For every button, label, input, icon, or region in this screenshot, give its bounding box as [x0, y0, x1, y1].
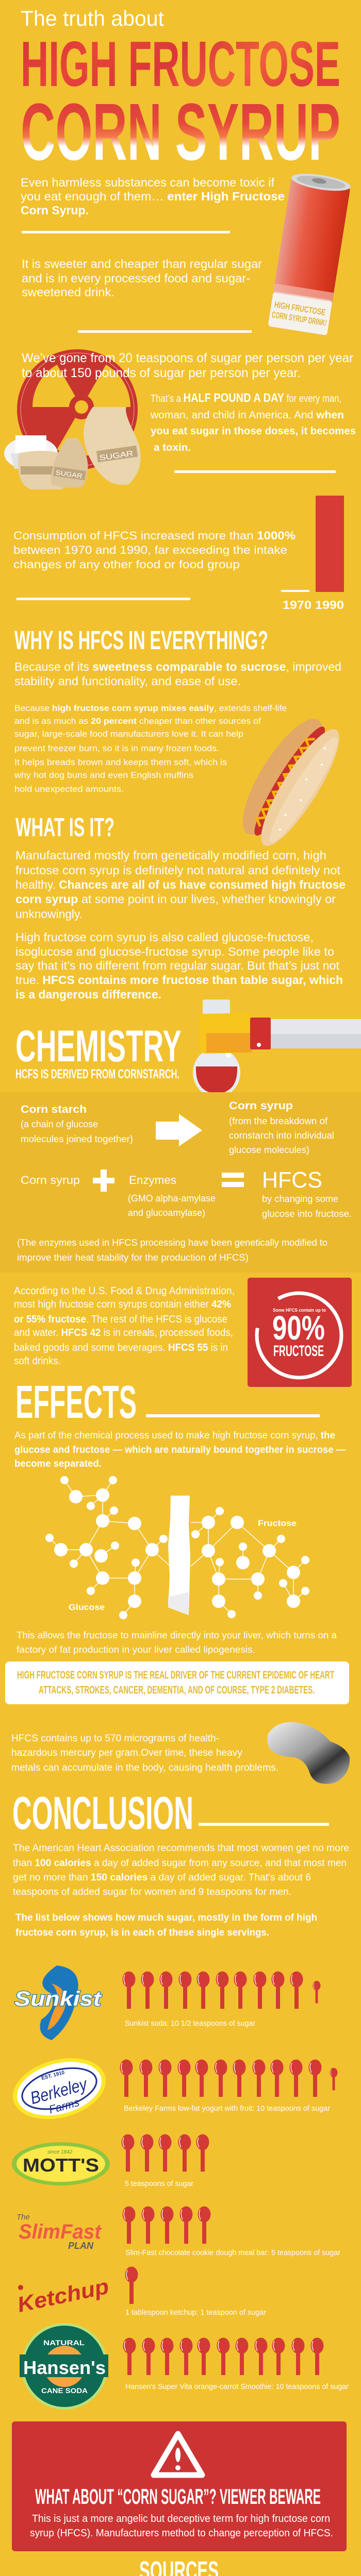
text: AHA recommendation: than 100 calories a day of added sugar from any source, and that most men	[13, 1858, 347, 1869]
text: corn starch: molecules joined together)	[21, 1134, 133, 1144]
panel: corn sugar warning	[12, 2421, 347, 2551]
text: mixes easily: and is as much as 20 percent cheaper than other sources of	[14, 716, 261, 726]
intro text: Even harmless substances can become toxic if	[21, 176, 275, 189]
text: 20 teaspoons to 150 pounds: to about 150 pounds of sugar per person per year.	[22, 366, 301, 380]
equation: corn syrup + enzymes = HFCS: Enzymes	[129, 1174, 176, 1187]
logo: slimfast: PLAN	[68, 2241, 94, 2251]
text: consumption 1000%: Consumption of HFCS increased more than 1000%	[13, 529, 296, 542]
equation: corn syrup + enzymes = HFCS: glucose into fructose.	[262, 1209, 352, 1219]
text: corn starch	[21, 1104, 133, 1144]
text: sweetness comparable: stability and functionality, and ease of use.	[14, 674, 241, 688]
icon: mercury drop	[267, 1722, 350, 1784]
logo: slimfast: The	[17, 2213, 30, 2222]
logo: slimfast: SlimFast	[19, 2221, 102, 2243]
chart: glucose and fructose molecules torn apart: Glucose	[69, 1602, 105, 1612]
logo: motts	[12, 2142, 110, 2185]
icon: sugar bags	[4, 407, 141, 489]
text: what is it body	[15, 849, 346, 1001]
icon: sugar bags: SUGAR	[99, 449, 134, 463]
callout: 90% fructose badge: FRUCTOSE	[273, 1343, 324, 1360]
icon: soda can: HIGH FRUCTOSE	[274, 300, 326, 317]
logo: hansens: CANE SODA	[41, 2386, 88, 2395]
text: mixes easily: prevent freezer burn, so it is in many frozen foods.	[14, 743, 219, 753]
panel: chemistry process band	[0, 1092, 361, 1273]
heading: effects: EFFECTS	[15, 1377, 137, 1428]
equation: corn syrup + enzymes = HFCS: Corn syrup	[21, 1174, 80, 1187]
logo: hansens: Hansen's	[23, 2357, 106, 2378]
equation: corn syrup + enzymes = HFCS: by changing some	[262, 1194, 338, 1204]
text: what is it body: fructose corn syrup is definitely not natural and definitely not	[15, 863, 341, 877]
icon: soda can: CORN SYRUP DRINK!	[271, 310, 327, 328]
text: FDA fructose content: most high fructose corn syrups contain either 42%	[14, 1299, 231, 1310]
logo: slimfast	[17, 2213, 102, 2251]
text: consumption 1000%: between 1970 and 1990, far exceeding the intake	[13, 544, 287, 556]
intro text	[21, 176, 285, 217]
heading: effects	[15, 1377, 320, 1428]
equation: corn syrup + enzymes = HFCS: HFCS	[262, 1167, 322, 1193]
icon: sugar bags: SUGAR	[55, 468, 83, 480]
text: glucose and fructose separated	[14, 1430, 346, 1469]
text: what is it body: say that it’s no different from regular sugar. But that’s just not	[15, 959, 340, 972]
bar chart: 1970 vs 1990: 1970 1990	[283, 598, 344, 612]
row: berkeley farms	[6, 2048, 338, 2129]
text: mixes easily: Because high fructose corn syrup mixes easily , extends shelf-life	[14, 703, 287, 713]
logo: sunkist	[14, 1965, 102, 2040]
text: what is it body: true. HFCS contains more fructose than table sugar, which	[15, 973, 343, 987]
icon: soda can	[268, 171, 352, 335]
panel: corn sugar warning: This is just a more angelic but deceptive term for high fructose corn	[32, 2513, 330, 2524]
text: FDA fructose content	[14, 1285, 235, 1367]
text: sweeter and cheaper	[22, 257, 262, 299]
text: sweeter and cheaper: It is sweeter and cheaper than regular sugar	[22, 257, 262, 270]
text: 20 teaspoons to 150 pounds	[22, 351, 353, 380]
text: half pound a day: a toxin.	[154, 442, 191, 453]
row: ketchup	[15, 2267, 266, 2317]
logo: motts: since 1842	[47, 2149, 73, 2155]
text: half pound a day: woman, and child in America. And when	[150, 410, 344, 421]
text: mercury: HFCS contains up to 570 micrograms of health-	[11, 1733, 219, 1744]
text: glucose and fructose separated: As part of the chemical process used to make high fructose corn syrup, the	[14, 1430, 335, 1441]
row: motts	[12, 2134, 209, 2188]
text: mixes easily: why hot dog buns and even English muffins	[14, 770, 193, 780]
text: what is it body: Manufactured mostly from genetically modified corn, high	[15, 849, 326, 862]
callout: 90% fructose badge: Some HFCS contain up to	[273, 1308, 326, 1313]
text: AHA recommendation: teaspoons of added sugar for women and 9 teaspoons for men.	[13, 1887, 291, 1897]
title: The truth about	[21, 6, 164, 30]
title	[21, 6, 340, 177]
text: mixes easily	[14, 703, 287, 794]
text: mercury	[11, 1733, 278, 1773]
text: corn starch: (a chain of glucose	[21, 1119, 98, 1129]
text: 20 teaspoons to 150 pounds: We’ve gone from 20 teaspoons of sugar per person per year	[22, 351, 353, 365]
panel: corn sugar warning: syrup (HFCS). Manufacturers method to change perception of HFCS.	[30, 2528, 333, 2539]
equation: corn syrup + enzymes = HFCS	[21, 1167, 352, 1219]
text: AHA recommendation: The American Heart Association recommends that most women get no more	[13, 1843, 349, 1854]
logo: ketchup: Ketchup	[15, 2274, 111, 2317]
logo: hansens	[20, 2323, 108, 2410]
text: what is it body: is a dangerous difference.	[15, 988, 161, 1001]
row: berkeley farms: Berkeley Farms low-fat yogurt with fruit: 10 teaspoons of sugar	[124, 2104, 330, 2113]
text: what is it body: isoglucose and glucose-fructose syrup. Some people like to	[15, 945, 334, 958]
text: enzymes note: improve their heat stability for the production of HFCS)	[17, 1252, 249, 1263]
text: AHA recommendation	[13, 1843, 349, 1938]
text: sweeter and cheaper: sweetened drink.	[22, 285, 114, 299]
callout: 90% fructose badge: 90%	[272, 1309, 325, 1347]
text: enzymes note	[17, 1238, 327, 1263]
icon: radiation symbol	[17, 349, 138, 470]
text: FDA fructose content: and water. HFCS 42 is in cereals, processed foods,	[14, 1327, 233, 1338]
bar chart: 1970 vs 1990	[281, 496, 344, 612]
chart: glucose and fructose molecules torn apart	[45, 1476, 309, 1619]
row: hansens: Hansen's Super Vita orange-carrot Smoothie: 10 teaspoons of sugar	[125, 2382, 349, 2391]
intro text: Corn Syrup.	[21, 204, 89, 217]
row: sunkist: Sunkist soda: 10 1/2 teaspoons of sugar	[125, 2019, 255, 2028]
text: mixes easily: It helps breads brown and keeps them soft, which is	[14, 757, 227, 767]
text: AHA recommendation: get no more than 150 calories a day of added sugar. That's about 6	[13, 1872, 311, 1883]
text: FDA fructose content: soft drinks.	[14, 1355, 61, 1367]
text: AHA recommendation: fructose corn syrup, is in each of these single servings.	[15, 1927, 269, 1938]
text: corn syrup: cornstarch into individual	[229, 1130, 334, 1141]
text: what is it body: unknowingly.	[15, 907, 83, 921]
logo: sunkist: Sunkist	[14, 1988, 102, 2010]
row: hansens	[20, 2323, 349, 2410]
equation: corn syrup + enzymes = HFCS: (GMO alpha-amylase	[128, 1193, 216, 1204]
chart: glucose and fructose molecules torn apart: Fructose	[258, 1518, 297, 1528]
text: half pound a day: That’s a HALF POUND A DAY for every man,	[151, 391, 341, 405]
logo: berkeley farms: EST. 1910	[41, 2070, 65, 2081]
intro text: you eat enough of them… enter High Fructose	[21, 190, 285, 203]
text: mixes easily: sugar, large-scale food manufacturers love it. It can help	[14, 729, 243, 739]
callout: 90% fructose badge	[248, 1278, 352, 1387]
text: what is it body: High fructose corn syrup is also called glucose-fructose,	[15, 930, 314, 944]
text: lipogenesis	[17, 1630, 337, 1655]
text: corn starch: Corn starch	[21, 1104, 87, 1115]
text: FDA fructose content: or 55% fructose. The rest of the HFCS is glucose	[14, 1314, 227, 1325]
row: motts: 5 teaspoons of sugar	[125, 2179, 193, 2188]
text: corn syrup	[229, 1100, 334, 1155]
arrow	[156, 1114, 202, 1146]
text: FDA fructose content: According to the U.S. Food & Drug Administration,	[14, 1285, 235, 1297]
logo: hansens: NATURAL	[43, 2338, 85, 2347]
text: what is it body: healthy. Chances are all of us have consumed high fructose	[15, 878, 346, 891]
text: corn syrup: (from the breakdown of	[229, 1116, 328, 1126]
heading: chemistry	[15, 1022, 182, 1081]
text: FDA fructose content: baked goods and some beverages. HFCS 55 is in	[14, 1342, 228, 1353]
logo: motts: MOTT'S	[23, 2155, 99, 2176]
text: AHA recommendation: The list below shows how much sugar, mostly in the form of high	[15, 1912, 317, 1923]
text: glucose and fructose separated: become separated.	[14, 1459, 102, 1469]
text: mixes easily: hold unexpected amounts.	[14, 784, 124, 794]
icon: hot dog	[228, 707, 351, 855]
text: consumption 1000%	[13, 529, 296, 571]
logo: berkeley farms: Berkeley	[28, 2074, 90, 2108]
text: consumption 1000%: changes of any other food or food group	[13, 558, 240, 571]
heading: chemistry: CHEMISTRY	[15, 1022, 182, 1071]
text: sweetness comparable	[14, 660, 341, 688]
callout: real driver of epidemic	[5, 1662, 349, 1704]
text: mercury: hazardous mercury per gram.Over time, these heavy	[11, 1748, 242, 1758]
text: enzymes note: (The enzymes used in HFCS processing have been genetically modified to	[17, 1238, 327, 1248]
text: glucose and fructose separated: glucose and fructose — which are naturally bound together in sucrose —	[14, 1445, 346, 1455]
text: sweetness comparable: Because of its sweetness comparable to sucrose, improved	[14, 660, 341, 673]
row: slimfast: Slim-Fast chocolate cookie dough meal bar: 5 teaspoons of sugar	[125, 2248, 340, 2257]
row: slimfast	[17, 2206, 340, 2257]
text: what is it body: corn syrup at some point in our lives, whether knowingly or	[15, 892, 336, 906]
text: half pound a day	[150, 391, 356, 453]
text: corn syrup: Corn syrup	[229, 1100, 293, 1112]
logo: berkeley farms: Farms	[47, 2096, 81, 2116]
logo: berkeley farms	[6, 2048, 112, 2129]
row: sunkist	[14, 1965, 321, 2040]
text: mercury: metals can accumulate in the body, causing health problems.	[11, 1762, 278, 1773]
heading: chemistry: HCFS IS DERIVED FROM CORNSTARCH.	[15, 1067, 179, 1081]
text: sweeter and cheaper: and is in every processed food and sugar-	[22, 272, 250, 285]
heading: conclusion: CONCLUSION	[12, 1788, 193, 1839]
row: ketchup: 1 tablespoon ketchup: 1 teaspoon of sugar	[125, 2308, 266, 2317]
text: lipogenesis: factory of fat production in your liver called lipogenesis.	[17, 1645, 255, 1655]
text: half pound a day: you eat sugar in those doses, it becomes	[151, 426, 356, 437]
heading: what is it: WHAT IS IT?	[15, 812, 114, 842]
text: corn syrup: glucose molecules)	[229, 1145, 309, 1155]
equation: corn syrup + enzymes = HFCS: and glucoamylase)	[128, 1208, 205, 1218]
icon: hand holding flask	[193, 999, 361, 1097]
text: lipogenesis: This allows the fructose to mainline directly into your liver, which turns on a	[17, 1630, 337, 1640]
icon: warning triangle	[154, 2434, 202, 2475]
